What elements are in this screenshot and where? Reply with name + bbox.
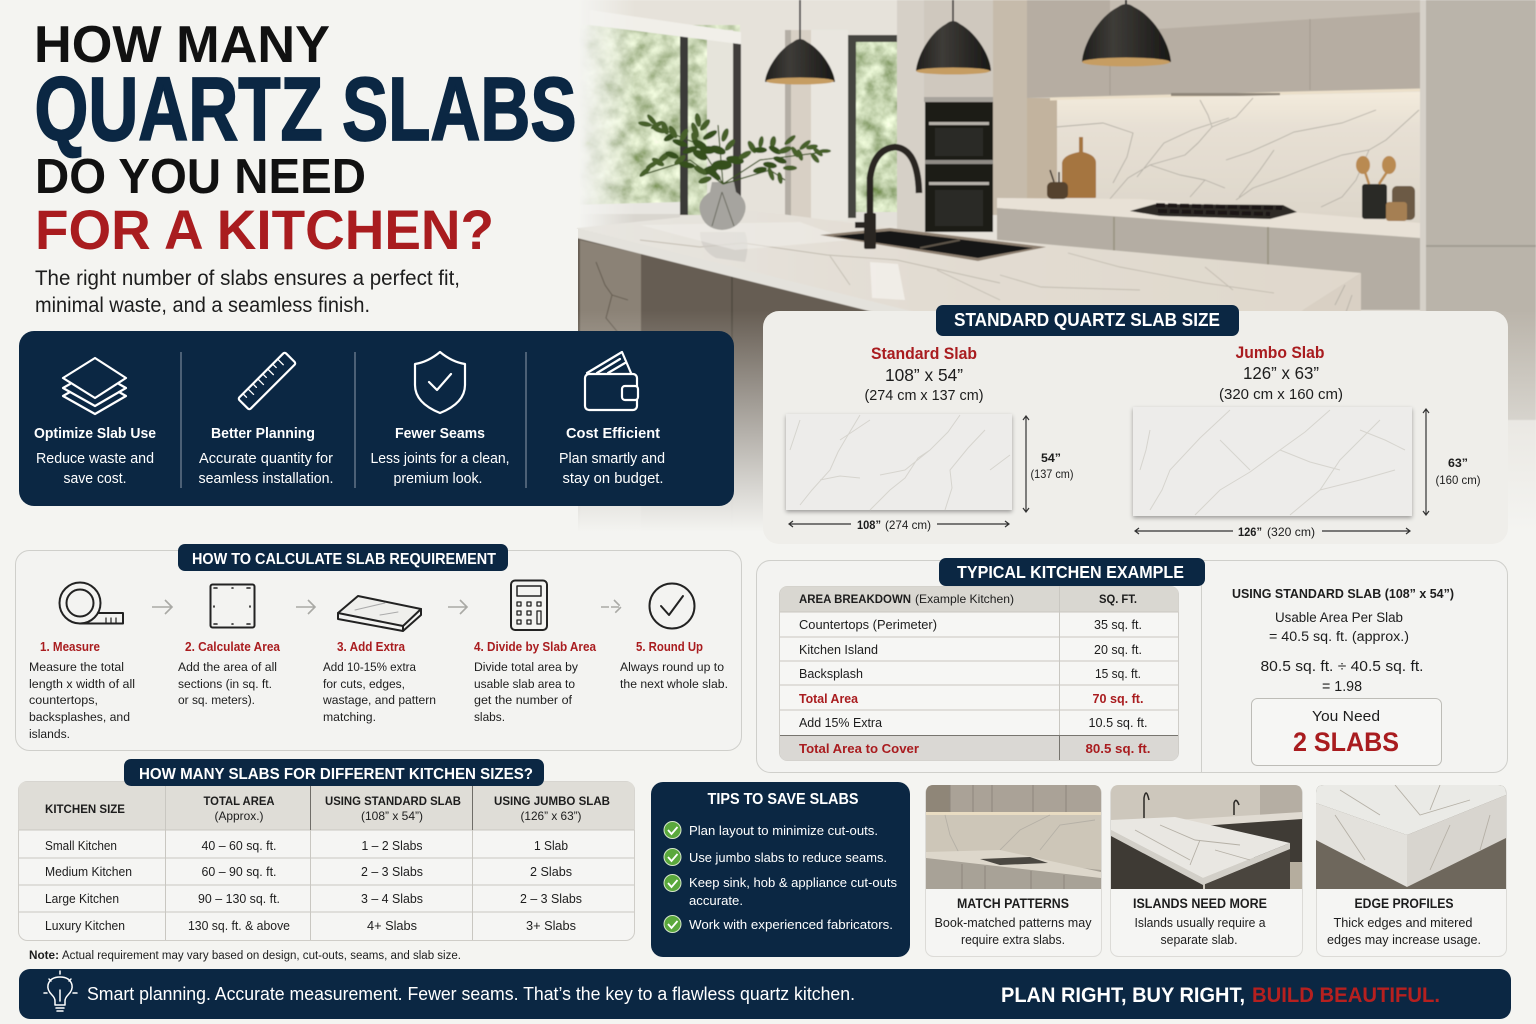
row: large: 90 – 130 sq. ft. (198, 892, 280, 906)
standard slab label (864, 345, 984, 404)
row: small: Small Kitchen (45, 839, 117, 853)
title: QUARTZ SLABS (34, 60, 576, 160)
card: islands need more: Islands usually require a (1134, 916, 1266, 930)
tip 1: Plan layout to minimize cut-outs. (689, 823, 878, 838)
heading (178, 544, 508, 571)
icon: light bulb (44, 971, 77, 1011)
step 2: sections (in sq. ft. (178, 677, 272, 691)
step 2: Add the area of all (178, 660, 277, 674)
arrow (296, 600, 315, 614)
note: Note: (29, 950, 59, 962)
slogan: BUILD BEAUTIFUL. (1252, 984, 1440, 1007)
step 4: usable slab area to (474, 677, 575, 691)
title (34, 16, 576, 261)
step 5: 5. Round Up (636, 640, 703, 654)
backsplash (1056, 92, 1420, 228)
title: DO YOU NEED (35, 150, 366, 204)
tagline: Smart planning. Accurate measurement. Fewer seams. That’s the key to a flawless quartz kitchen. (87, 983, 855, 1004)
breakdown table: Add 15% Extra (799, 716, 882, 730)
calculation: 80.5 sq. ft. ÷ 40.5 sq. ft. (1260, 659, 1424, 675)
icon: slab (338, 596, 421, 631)
card: edge profiles (1316, 785, 1506, 956)
heading: STANDARD QUARTZ SLAB SIZE (954, 309, 1220, 330)
standard slab label: Standard Slab (871, 345, 977, 363)
step 5: the next whole slab. (620, 677, 728, 691)
heading: TYPICAL KITCHEN EXAMPLE (957, 562, 1184, 582)
table header: (108” x 54”) (361, 809, 423, 823)
heading (939, 558, 1205, 586)
card: edge profiles: Thick edges and mitered (1334, 916, 1473, 930)
dimension: 108 in: (274 cm) (885, 518, 931, 532)
subtitle: The right number of slabs ensures a perfect fit, (35, 267, 460, 290)
step 2: or sq. meters). (178, 693, 255, 707)
table header: USING STANDARD SLAB (325, 794, 461, 808)
card: edge profiles: EDGE PROFILES (1354, 896, 1454, 911)
step 3: for cuts, edges, (323, 677, 405, 691)
upper cabinets (1027, 0, 1425, 99)
table header: USING JUMBO SLAB (494, 794, 610, 808)
heading (936, 305, 1239, 336)
heading: HOW TO CALCULATE SLAB REQUIREMENT (192, 551, 496, 568)
row: small: 1 Slab (534, 839, 568, 853)
card: match patterns: Book-matched patterns may (934, 916, 1092, 930)
row: luxury (45, 919, 576, 933)
step 3: Add 10-15% extra (323, 660, 416, 674)
row: luxury: 4+ Slabs (367, 919, 417, 933)
back counter (996, 198, 1420, 228)
step 1: countertops, (29, 693, 98, 707)
benefit: fewer seams: premium look. (394, 471, 482, 487)
step 1: backsplashes, and (29, 710, 130, 724)
row: luxury: Luxury Kitchen (45, 919, 125, 933)
dimension: 54 in (1023, 416, 1074, 512)
step 2 (178, 640, 281, 707)
benefit: better planning: seamless installation. (198, 471, 334, 487)
benefit: better planning: Accurate quantity for (199, 451, 333, 467)
calculation: = 40.5 sq. ft. (approx.) (1269, 629, 1409, 644)
breakdown table: 15 sq. ft. (1095, 667, 1141, 681)
dimension: 63 in: 63” (1448, 456, 1468, 470)
breakdown table: 20 sq. ft. (1094, 643, 1142, 657)
breakdown table: Countertops (Perimeter) (799, 618, 937, 632)
cutting board and utensils (1047, 137, 1415, 221)
panel: kitchen sizes table (18, 759, 634, 940)
row: luxury: 130 sq. ft. & above (188, 919, 290, 933)
dimension: 126 in: 126” (1238, 525, 1262, 539)
row: large: 3 – 4 Slabs (361, 892, 423, 906)
panel: tips to save slabs (651, 782, 910, 957)
step 1: 1. Measure (40, 640, 100, 654)
benefit: better planning (198, 425, 334, 487)
photo: marble corner (1316, 785, 1506, 889)
step 1: Measure the total (29, 660, 124, 674)
breakdown table: (Example Kitchen) (915, 592, 1014, 606)
row: medium: 2 – 3 Slabs (361, 865, 423, 879)
icon: stacked layers (63, 358, 126, 414)
icon: wallet (585, 352, 638, 410)
vase with plant (638, 113, 831, 230)
breakdown table: SQ. FT. (1099, 592, 1137, 606)
panel: typical kitchen example (756, 558, 1508, 772)
dimension: 54 in: (137 cm) (1030, 467, 1074, 481)
footer banner (19, 969, 1511, 1019)
tip 2: Use jumbo slabs to reduce seams. (689, 850, 887, 865)
step 5 (620, 640, 728, 691)
panel: tips to save slabs: TIPS TO SAVE SLABS (708, 791, 859, 808)
row: medium (45, 865, 572, 879)
slogan: PLAN RIGHT, BUY RIGHT, (1001, 984, 1245, 1007)
icon: tape measure (60, 582, 123, 624)
hob (1130, 204, 1297, 219)
callout: you need 2 slabs: 2 SLABS (1293, 727, 1399, 757)
panel: how to calculate (16, 544, 742, 750)
jumbo slab image (1133, 407, 1412, 516)
card: islands need more: ISLANDS NEED MORE (1133, 896, 1267, 911)
photo fades (560, 229, 1536, 569)
title: HOW MANY (34, 16, 330, 74)
breakdown table: 80.5 sq. ft. (1086, 742, 1150, 756)
step 4: 4. Divide by Slab Area (474, 640, 597, 654)
icon: shield (415, 352, 465, 413)
step 4: slabs. (474, 710, 505, 724)
dimension: 54 in: 54” (1041, 451, 1061, 465)
table header: KITCHEN SIZE (45, 802, 125, 816)
step 5: Always round up to (620, 660, 724, 674)
breakdown table: Kitchen Island (799, 643, 878, 657)
table header: (Approx.) (214, 809, 264, 823)
card: islands need more (1110, 785, 1302, 956)
second window (848, 35, 898, 226)
note: Actual requirement may vary based on design, cut-outs, seams, and slab size. (62, 950, 461, 962)
card: match patterns: require extra slabs. (961, 933, 1065, 947)
dimension: 126 in (1135, 525, 1410, 539)
benefit: better planning: Better Planning (211, 425, 315, 442)
row: medium: 2 Slabs (530, 865, 572, 879)
subtitle: minimal waste, and a seamless finish. (35, 294, 370, 317)
row: large (45, 892, 582, 906)
faucet (855, 147, 919, 249)
standard slab image (786, 414, 1012, 510)
card: islands need more: separate slab. (1160, 933, 1238, 947)
calculation: Usable Area Per Slab (1275, 610, 1403, 625)
step 3 (322, 640, 436, 724)
step 3: 3. Add Extra (337, 640, 406, 654)
row: small: 1 – 2 Slabs (362, 839, 422, 853)
benefit: cost efficient: stay on budget. (562, 471, 664, 487)
title: FOR A KITCHEN? (35, 198, 494, 261)
photo: modern kitchen with quartz island (560, 0, 1536, 569)
island countertop (577, 214, 1360, 311)
calculation: USING STANDARD SLAB (108” x 54”) (1232, 586, 1454, 601)
jumbo slab label (1219, 344, 1343, 403)
tip 3: accurate. (689, 893, 743, 908)
pendant lamp 1 (765, 0, 835, 84)
dimension: 108 in (789, 518, 1009, 532)
standard slab label: 108” x 54” (885, 365, 963, 385)
pendant lamp 3 (1082, 0, 1171, 66)
slogan (1001, 984, 1440, 1007)
jumbo slab label: Jumbo Slab (1236, 344, 1324, 362)
row: large: Large Kitchen (45, 892, 119, 906)
card: match patterns: MATCH PATTERNS (957, 896, 1069, 911)
panel: benefits (19, 331, 734, 506)
benefit: fewer seams (370, 425, 510, 487)
arrow (448, 600, 467, 614)
breakdown table: Backsplash (799, 667, 863, 681)
calculation: = 1.98 (1322, 679, 1362, 695)
dimension: 108 in: 108” (857, 518, 881, 532)
benefit: cost efficient (559, 425, 665, 487)
benefit: optimize slab use: save cost. (64, 471, 126, 487)
jumbo slab label: 126” x 63” (1243, 363, 1319, 383)
icon: area square (210, 584, 254, 628)
panel: standard quartz slab size (763, 305, 1508, 544)
step 3: matching. (323, 710, 376, 724)
dimension: 63 in (1423, 409, 1481, 515)
row: medium: 60 – 90 sq. ft. (202, 865, 276, 879)
photo: matched backsplash (926, 785, 1101, 889)
table header: TOTAL AREA (204, 794, 275, 808)
photo: island (1111, 785, 1302, 889)
sink (820, 228, 1046, 261)
calculation (1232, 586, 1454, 695)
breakdown table: 35 sq. ft. (1094, 618, 1142, 632)
benefit: cost efficient: Plan smartly and (559, 451, 665, 467)
dimension: 63 in: (160 cm) (1436, 473, 1481, 487)
icon: ruler (238, 352, 296, 410)
step 1: islands. (29, 727, 70, 741)
pendant lamp 2 (916, 0, 991, 74)
heading (124, 759, 544, 786)
oven column (924, 0, 994, 232)
callout: you need 2 slabs: You Need (1312, 708, 1380, 725)
jumbo slab label: (320 cm x 160 cm) (1219, 387, 1343, 403)
benefit: fewer seams: Fewer Seams (395, 425, 485, 442)
island body (578, 238, 1362, 520)
icon: check circle (650, 584, 694, 628)
tip 3: Keep sink, hob & appliance cut-outs (689, 875, 897, 890)
step 1: length x width of all (29, 677, 135, 691)
row: small: 40 – 60 sq. ft. (202, 839, 276, 853)
benefit: optimize slab use: Optimize Slab Use (34, 425, 156, 442)
benefit: cost efficient: Cost Efficient (566, 425, 660, 442)
tip 3 (664, 874, 897, 908)
card: edge profiles: edges may increase usage. (1327, 933, 1481, 947)
table header: (126” x 63”) (520, 809, 582, 823)
subtitle (35, 267, 460, 317)
benefit: optimize slab use: Reduce waste and (36, 451, 154, 467)
icon: calculator (511, 580, 547, 630)
row: luxury: 3+ Slabs (526, 919, 576, 933)
card: match patterns (926, 785, 1102, 956)
step 4 (474, 640, 597, 724)
step 2: 2. Calculate Area (185, 640, 281, 654)
step 1 (29, 640, 135, 741)
breakdown table: Total Area to Cover (799, 742, 919, 756)
row: small (45, 839, 568, 853)
callout: you need 2 slabs (1252, 698, 1442, 766)
breakdown table: 70 sq. ft. (1092, 692, 1144, 706)
breakdown table (780, 586, 1178, 760)
table header (45, 794, 610, 823)
arrow (601, 600, 621, 614)
row: large: 2 – 3 Slabs (520, 892, 582, 906)
benefit: fewer seams: Less joints for a clean, (370, 451, 510, 467)
tall cabinet (1420, 0, 1536, 420)
step 3: wastage, and pattern (322, 693, 436, 707)
breakdown table: Total Area (799, 692, 859, 706)
breakdown table: 10.5 sq. ft. (1088, 716, 1148, 730)
step 4: get the number of (474, 693, 573, 707)
tip 4: Work with experienced fabricators. (689, 917, 893, 932)
breakdown table: AREA BREAKDOWN (799, 592, 911, 606)
window with foliage (584, 14, 742, 223)
standard slab label: (274 cm x 137 cm) (864, 388, 984, 404)
row: medium: Medium Kitchen (45, 865, 132, 879)
dimension: 126 in: (320 cm) (1267, 525, 1315, 539)
benefit: optimize slab use (34, 425, 156, 487)
arrow (152, 600, 172, 614)
step 4: Divide total area by (474, 660, 579, 674)
heading: HOW MANY SLABS FOR DIFFERENT KITCHEN SIZES? (139, 766, 533, 783)
